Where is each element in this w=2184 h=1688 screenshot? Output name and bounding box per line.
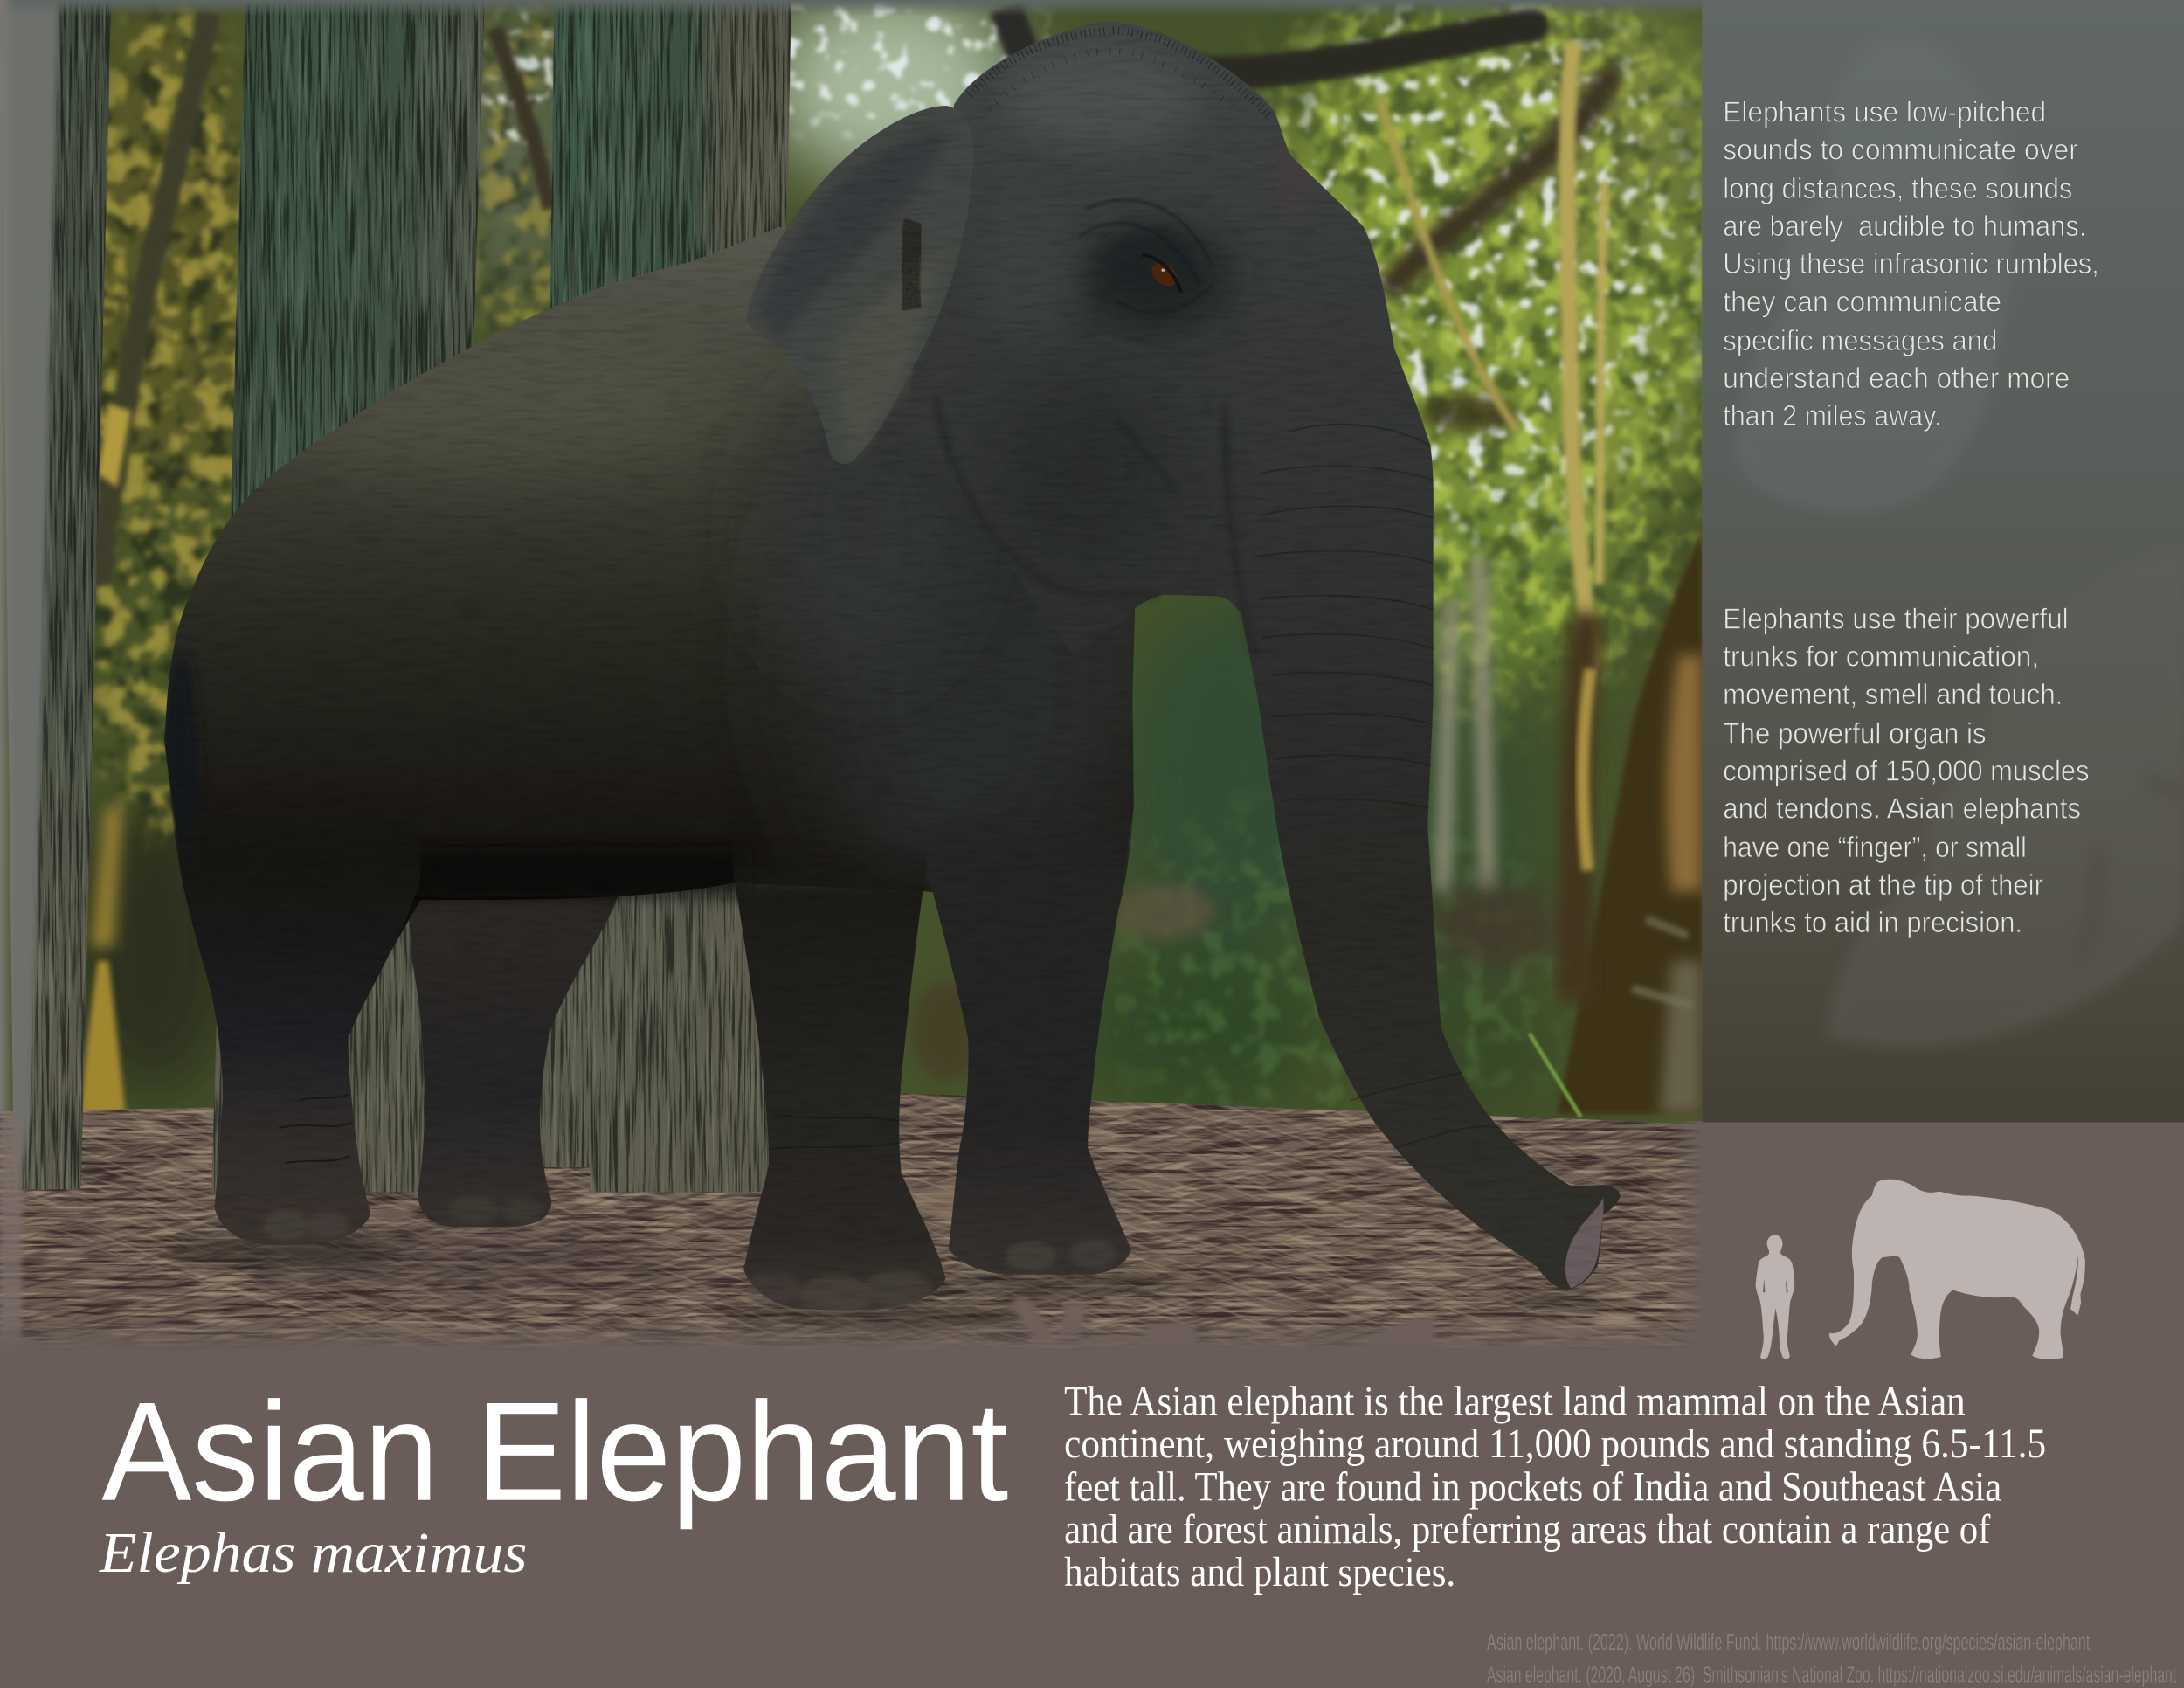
ground: straw floor: [0, 1094, 1699, 1358]
text block: trunk fact: projection at the tip of their: [1723, 869, 2043, 902]
text block: communication fact: are barely audible to humans.: [1723, 211, 2086, 243]
neck folds: [936, 397, 1174, 596]
trunk 1: [0, 0, 114, 1193]
text block: communication fact: Using these infrasonic rumbles,: [1723, 248, 2099, 280]
blurred leaf shadow: lower: [1826, 550, 2184, 1047]
body: [164, 227, 1142, 952]
references: [1487, 1630, 2176, 1688]
text block: description: feet tall. They are found in pockets of India and Southeast Asia: [1064, 1463, 2001, 1510]
background trees, branches and vines: [80, 7, 1702, 1117]
icon: human silhouette: [1756, 1235, 1794, 1359]
near rear leg: [164, 741, 421, 1245]
toes of far legs: [448, 1195, 1117, 1271]
text block: trunk fact: comprised of 150,000 muscles: [1723, 755, 2090, 787]
trunk tip: [1565, 1198, 1604, 1289]
text block: trunk fact: movement, smell and touch.: [1723, 679, 2063, 711]
text block: communication fact: long distances, these sounds: [1723, 173, 2072, 205]
text block: trunk fact: trunks for communication,: [1723, 641, 2039, 674]
blurred leaf shadow: upper: [1734, 37, 2011, 512]
trunk 2: [209, 0, 487, 1193]
text block: description: [1064, 1379, 2046, 1595]
eye: [1080, 200, 1212, 313]
near front leg: [733, 835, 946, 1315]
text block: communication fact: specific messages and: [1723, 325, 1997, 357]
text block: communication fact: they can communicate: [1723, 286, 2001, 318]
panel: side facts background: [1702, 0, 2184, 1123]
text block: trunk fact: and tendons. Asian elephants: [1723, 793, 2081, 826]
size comparison silhouettes: [1756, 1180, 2085, 1359]
text block: communication fact: than 2 miles away.: [1723, 400, 1942, 432]
text block: trunk fact: The powerful organ is: [1723, 717, 1987, 750]
far front leg: [926, 668, 1134, 1275]
scientific name: Elephas maximus: [99, 1522, 527, 1585]
skin tone and texture: [153, 14, 1629, 1316]
photo edge fades: [0, 0, 1704, 1358]
leaf slits: [2076, 780, 2184, 961]
text block: trunk fact: have one “finger”, or small: [1723, 832, 2027, 864]
far rear leg: [407, 891, 620, 1227]
trunk crease: [1225, 404, 1254, 654]
foreground tree trunks: [0, 0, 794, 1193]
ear: [747, 106, 974, 464]
trunk 3: [536, 0, 794, 1193]
head and trunk: [905, 22, 1621, 1290]
text block: description: and are forest animals, preferring areas that contain a range of: [1064, 1506, 1990, 1553]
text block: description: habitats and plant species.: [1064, 1549, 1455, 1595]
text block: communication fact: Elephants use low-pitched: [1723, 96, 2046, 128]
photo: forest scene: [0, 0, 1702, 1358]
text block: communication fact: [1723, 96, 2099, 432]
crown hair: [970, 31, 1270, 117]
text block: communication fact: sounds to communicate over: [1723, 135, 2078, 167]
text block: description: The Asian elephant is the largest land mammal on the Asian: [1064, 1379, 1966, 1425]
forest backdrop: [0, 0, 1727, 1128]
title: Asian Elephant: [101, 1373, 1008, 1531]
background foliage: [0, 0, 1702, 1128]
text block: trunk fact: Elephants use their powerful: [1723, 604, 2069, 636]
icon: elephant silhouette: [1829, 1180, 2085, 1359]
text block: trunk fact: [1723, 604, 2090, 939]
text block: communication fact: understand each other more: [1723, 363, 2070, 395]
text block: trunk fact: trunks to aid in precision.: [1723, 907, 2022, 939]
elephant: [153, 14, 1629, 1316]
text block: description: continent, weighing around 11,000 pounds and standing 6.5-11.5: [1064, 1421, 2046, 1467]
trunk wrinkles: [1254, 425, 1502, 1149]
